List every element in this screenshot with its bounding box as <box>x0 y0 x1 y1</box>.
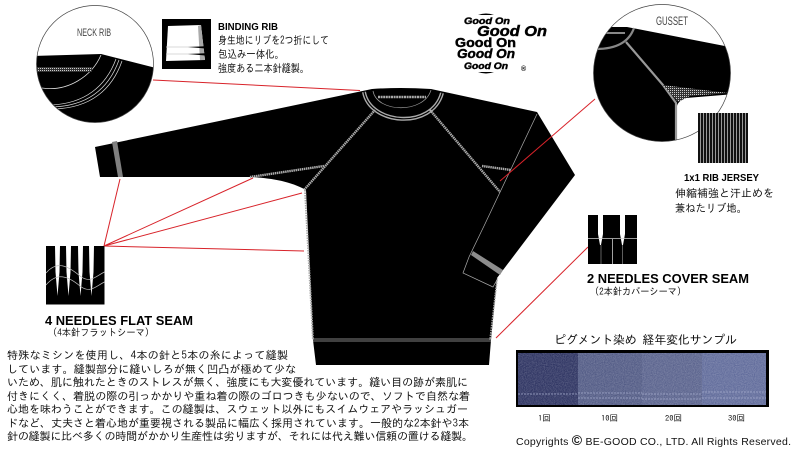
2 needles cover seam text: （2本針カバーシーマ） <box>590 286 686 297</box>
wash count labels: 1回 <box>538 414 551 423</box>
swatch: 1 wash <box>518 353 578 405</box>
wash count labels <box>538 414 745 423</box>
seam description paragraph: いため、肌に触れたときのストレスが無く、強度にも大変優れています。縫い目の跡が素肌に <box>7 376 468 388</box>
gusset callout <box>590 4 735 145</box>
gusset detail <box>590 27 735 145</box>
label: gusset: GUSSET <box>656 14 688 28</box>
binding rib text: 強度ある二本針縫製。 <box>218 62 309 74</box>
binding rib icon <box>162 19 211 69</box>
swatch: 30 washes <box>702 353 766 405</box>
Good On logo: Good On <box>464 61 509 71</box>
binding rib text: 身生地にリブを2つ折にして <box>218 34 329 46</box>
cuff seams <box>112 141 503 275</box>
Good On logo: ® <box>521 65 527 73</box>
seam description paragraph: 特殊なミシンを使用し、4本の針と5本の糸によって縫製 <box>7 349 288 361</box>
wash count labels: 20回 <box>665 414 682 423</box>
raglan and underarm seams <box>250 110 511 341</box>
rib jersey text <box>675 173 774 214</box>
swatch: 10 washes <box>578 353 642 405</box>
rib jersey swatch <box>698 113 748 163</box>
neck rib detail <box>36 54 153 122</box>
seam description paragraph: 針の縫製に比べ多くの時間がかかり生産性は劣りますが、それには代え難い信頼の置ける縫製。 <box>7 430 473 442</box>
rib jersey text: 1x1 RIB JERSEY <box>684 173 759 184</box>
fabric noise <box>518 353 766 405</box>
4 needles flat seam text: （4本針フラットシーマ） <box>48 327 154 338</box>
Good On logo: Good On <box>455 35 516 50</box>
pigment dye sample strip <box>516 350 769 407</box>
2 needles cover seam text: 2 NEEDLES COVER SEAM <box>587 272 749 286</box>
seam description paragraph <box>7 349 473 442</box>
red leader lines <box>104 80 595 338</box>
seam description paragraph: 付きにくく、着脱の際の引っかかりや重ね着の際のゴロつきも少ないので、ソフトで自然な着 <box>7 390 470 402</box>
rib jersey text: 兼ねたリブ地。 <box>675 202 747 214</box>
Good On logo <box>455 14 547 74</box>
wash count labels: 10回 <box>601 414 618 423</box>
sweatshirt illustration <box>95 88 575 365</box>
Good On logo: Good On <box>464 16 511 26</box>
label: neck rib: NECK RIB <box>77 27 111 39</box>
seam description paragraph: 心地を味わうことができます。この縫製は、スウェット以外にもスイムウェアやラッシュガー <box>7 403 468 415</box>
binding rib text <box>218 22 329 74</box>
hem stitching <box>518 392 766 399</box>
4 needles flat seam text: 4 NEEDLES FLAT SEAM <box>45 314 193 328</box>
2 needles cover seam icon <box>588 215 637 264</box>
seam description paragraph: ドなど、丈夫さと着心地が重要視される製品に幅広く採用されています。一般的な2本針や3本 <box>7 417 469 429</box>
neck rib callout <box>36 5 154 123</box>
4 needles flat seam icon <box>46 246 104 304</box>
binding rib text: BINDING RIB <box>218 22 278 33</box>
binding rib text: 包込み一体化。 <box>218 48 284 60</box>
swatch: 20 washes <box>642 353 702 405</box>
Good On logo: Good On <box>477 23 547 40</box>
wash count labels: 30回 <box>728 414 745 423</box>
copyright line: Copyrights © BE-GOOD CO., LTD. All Rights Reserved. <box>516 432 791 448</box>
4 needles flat seam text <box>45 314 193 338</box>
seam description paragraph: しています。縫製部分に縫いしろが無く凹凸が極めて少な <box>7 363 296 375</box>
sweatshirt body silhouette <box>95 88 575 365</box>
collar seams <box>364 90 442 119</box>
right sleeve outline <box>463 114 537 287</box>
rib jersey text: 伸縮補強と汗止めを <box>675 187 774 199</box>
pigment dye sample heading: ピグメント染め 経年変化サンプル <box>554 333 737 346</box>
Good On logo: Good On <box>457 46 515 61</box>
2 needles cover seam text <box>587 272 749 297</box>
